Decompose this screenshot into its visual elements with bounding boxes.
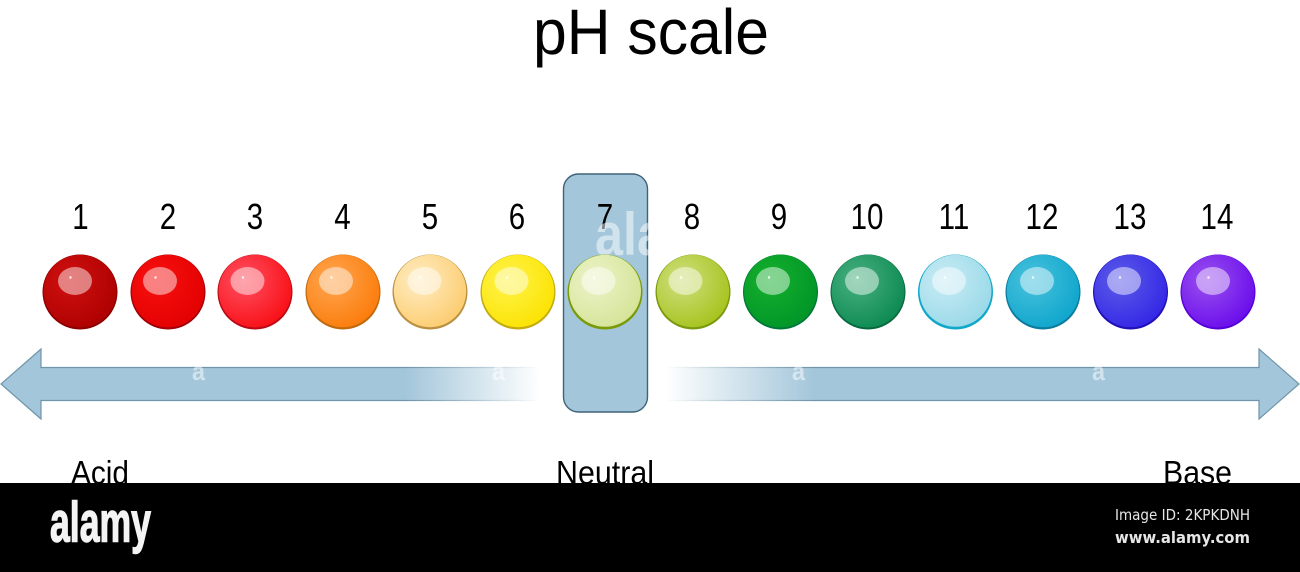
- pH numbers: 13: [1114, 196, 1146, 237]
- ball: pH 2: [130, 254, 206, 330]
- alamy logo: alamy: [50, 490, 151, 554]
- watermark: a: [192, 356, 205, 386]
- ball: pH 1: [42, 254, 118, 330]
- ball: pH 11: [918, 254, 993, 330]
- ball: pH 4: [306, 254, 380, 330]
- pH numbers: 11: [939, 196, 969, 237]
- pH numbers: 5: [422, 196, 438, 237]
- pH numbers: 12: [1026, 196, 1058, 237]
- pH numbers: 1: [72, 196, 89, 237]
- watermark: a: [792, 356, 805, 386]
- pH numbers: 9: [771, 196, 787, 237]
- pH numbers: 3: [247, 196, 263, 237]
- pH numbers: [72, 196, 1233, 237]
- watermark: a: [1092, 356, 1105, 386]
- website: www.alamy.com: [1115, 528, 1250, 547]
- pH numbers: 4: [334, 196, 351, 237]
- pH numbers: 8: [684, 196, 700, 237]
- watermark: y: [685, 222, 705, 263]
- ball: pH 12: [1006, 254, 1080, 330]
- neutral highlight box: [564, 174, 648, 412]
- ball: pH 14: [1180, 254, 1256, 330]
- ball: pH 3: [218, 254, 292, 330]
- ball: pH 5: [392, 254, 468, 330]
- label: Neutral: Neutral: [556, 454, 654, 491]
- right arrow: base direction: [665, 349, 1299, 419]
- ball: pH 6: [480, 254, 556, 330]
- pH numbers: 2: [160, 196, 176, 237]
- pH numbers: 10: [851, 196, 883, 237]
- image id: Image ID: 2KPKDNH: [1115, 506, 1250, 524]
- watermark: a: [492, 356, 505, 386]
- ball: pH 13: [1093, 254, 1168, 330]
- pH numbers: 6: [509, 196, 525, 237]
- ball: pH 9: [743, 254, 818, 330]
- pH numbers: 14: [1201, 196, 1233, 237]
- ball: pH 10: [830, 254, 906, 330]
- watermark: ala: [595, 201, 666, 268]
- label: Acid: Acid: [71, 454, 129, 491]
- watermark: [192, 201, 1105, 386]
- pH numbers: 7: [597, 196, 613, 237]
- ball: pH 8: [656, 254, 730, 330]
- footer bar: [0, 483, 1300, 572]
- ball: pH 7: [568, 254, 642, 330]
- left arrow: acid direction: [1, 349, 540, 419]
- label: Base: Base: [1163, 454, 1232, 491]
